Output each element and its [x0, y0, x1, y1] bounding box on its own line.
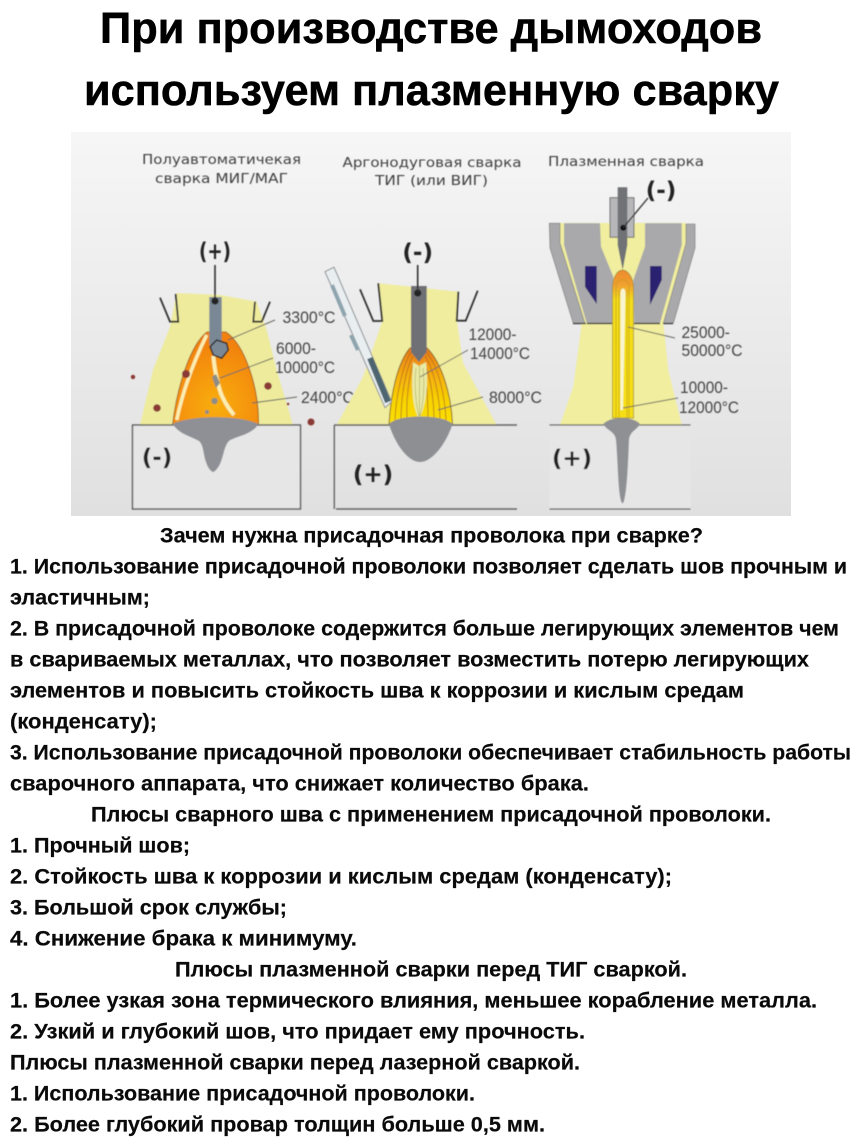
text block: filler wire purpose: 1. Использование присадочной проволоки позволяет сделать шов прочным и: [10, 554, 847, 578]
panel: TIG welding: 12000-: [468, 326, 516, 344]
text block: plasma versus laser: Плюсы плазменной сварки перед лазерной сваркой.: [10, 1050, 580, 1074]
title: используем плазменную сварку: [84, 67, 779, 115]
text block: plasma versus laser: 2. Более глубокий провар толщин больше 0,5 мм.: [10, 1112, 545, 1136]
panel: plasma welding: [548, 154, 743, 509]
panel: MIG/MAG welding: (-): [142, 445, 172, 471]
text block: plasma versus laser: 1. Использование присадочной проволоки.: [10, 1082, 475, 1106]
panel: TIG welding: ТИГ (или ВИГ): [374, 173, 488, 189]
panel: plasma welding: (-): [646, 178, 676, 204]
text block: filler wire purpose: [10, 524, 851, 796]
panel: MIG/MAG welding: 2400°C: [301, 389, 354, 407]
panel: MIG/MAG welding: 10000°C: [275, 359, 335, 377]
text block: filler wire purpose: эластичным;: [10, 586, 150, 610]
text block: advantages of the weld seam: 2. Стойкость шва к коррозии и кислым средам (конденсату);: [10, 864, 672, 888]
text block: filler wire purpose: 2. В присадочной проволоке содержится больше легирующих элементов чем: [10, 616, 839, 640]
text block: filler wire purpose: 3. Использование присадочной проволоки обеспечивает стабильность работы: [10, 740, 851, 764]
panel: MIG/MAG welding: 6000-: [276, 340, 316, 358]
text block: filler wire purpose: сварочного аппарата, что снижает количество брака.: [10, 772, 589, 796]
panel: plasma welding: Плазменная сварка: [548, 154, 704, 170]
text block: advantages of the weld seam: 3. Большой срок службы;: [10, 896, 287, 920]
panel: TIG welding: (-): [402, 240, 433, 266]
panel: plasma welding: 10000-: [680, 379, 728, 397]
text block: plasma versus TIG: 2. Узкий и глубокий шов, что придает ему прочность.: [10, 1020, 585, 1044]
text block: filler wire purpose: в свариваемых металлах, что позволяет возместить потерю легирующих: [10, 648, 809, 672]
panel: MIG/MAG welding: сварка МИГ/МАГ: [155, 171, 288, 187]
text block: plasma versus TIG: 1. Более узкая зона термического влияния, меньшее корабление металла.: [10, 988, 817, 1012]
text block: plasma versus laser: [10, 1050, 580, 1136]
text block: filler wire purpose: элементов и повысить стойкость шва к коррозии и кислым средам: [10, 678, 744, 702]
panel: plasma welding: 50000°C: [682, 342, 743, 360]
title: [84, 5, 779, 115]
panel: plasma welding: 25000-: [682, 324, 730, 342]
text block: advantages of the weld seam: 4. Снижение брака к минимуму.: [10, 926, 357, 950]
text block: filler wire purpose: (конденсату);: [10, 710, 157, 734]
panel: TIG welding: Аргонодуговая сварка: [342, 155, 522, 171]
panel: MIG/MAG welding: (+): [199, 239, 231, 265]
text block: advantages of the weld seam: [10, 802, 771, 950]
panel: MIG/MAG welding: 3300°C: [282, 309, 336, 327]
text block: filler wire purpose: Зачем нужна присадочная проволока при сварке?: [160, 524, 703, 548]
panel: TIG welding: [325, 155, 542, 509]
panel: plasma welding: 12000°C: [679, 399, 739, 417]
panel: plasma welding: (+): [552, 446, 592, 472]
panel: TIG welding: (+): [353, 462, 393, 488]
panel: MIG/MAG welding: Полуавтоматичекая: [142, 152, 301, 168]
panel: MIG/MAG welding: [131, 152, 354, 509]
text block: plasma versus TIG: [10, 958, 817, 1044]
diagram: comparison of welding methods: [71, 132, 791, 516]
panel: TIG welding: 8000°C: [489, 389, 542, 407]
panel: TIG welding: 14000°C: [470, 345, 530, 363]
text block: advantages of the weld seam: Плюсы сварного шва с применением присадочной проволоки.: [91, 802, 771, 826]
text block: advantages of the weld seam: 1. Прочный шов;: [10, 834, 190, 858]
title: При производстве дымоходов: [100, 5, 762, 53]
text block: plasma versus TIG: Плюсы плазменной сварки перед ТИГ сваркой.: [175, 958, 687, 982]
